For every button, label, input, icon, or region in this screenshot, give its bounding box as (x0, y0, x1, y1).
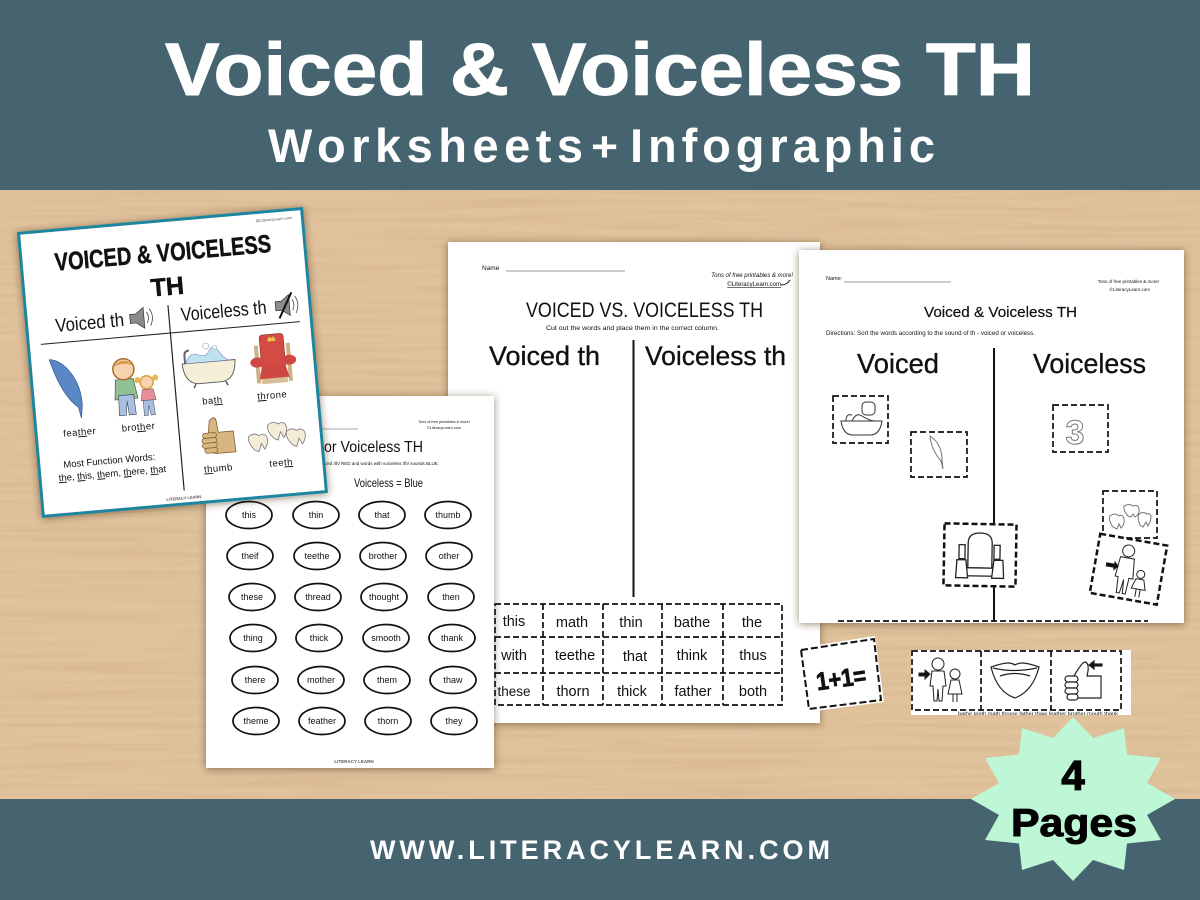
card: number three: 3 (1066, 414, 1084, 452)
card: teeth (1103, 491, 1157, 538)
oval words: feather (308, 716, 336, 726)
word cut-out grid: math (556, 615, 588, 631)
credit: @LiteracyLearn.com (255, 215, 293, 223)
word ovals (226, 502, 477, 734)
label: brother: brother (121, 421, 156, 435)
heading: voiced th: Voiced th (54, 310, 125, 337)
function words note: the, this, them, there, that (58, 464, 167, 484)
card: bath (833, 396, 888, 443)
card: number three (1053, 405, 1108, 452)
worksheet title: Voiced & Voiceless TH (924, 304, 1077, 321)
poster title: VOICED & VOICELESS (54, 230, 272, 277)
credit note: ©LiteracyLearn.com (427, 426, 461, 430)
oval words: thick (310, 633, 329, 643)
name field: Name: (826, 276, 843, 282)
oval words (241, 510, 464, 726)
word cut-out grid: father (674, 684, 712, 700)
credit note: Tons of free printables & more! (1098, 279, 1159, 284)
subtitle word: infographic: Infographic (630, 119, 935, 172)
credit note: Tons of free printables & more! (711, 273, 793, 279)
oval words: this (242, 510, 256, 520)
oval words: them (377, 675, 397, 685)
word cut-out grid: with (500, 648, 527, 664)
word cut-out grid: thus (739, 648, 767, 664)
oval words: thin (309, 510, 323, 520)
column heading: voiced: Voiced th (489, 341, 600, 371)
worksheet: cut and sort words (448, 242, 820, 723)
logo: LITERACY LEARN (334, 759, 374, 764)
card: one plus one (799, 636, 884, 712)
badge number: 4 (1061, 752, 1085, 799)
subtitle (268, 119, 935, 172)
name field: Name (482, 265, 500, 272)
oval words: these (241, 592, 263, 602)
credit note (418, 420, 470, 430)
word cut-out grid: thin (619, 615, 643, 631)
oval words: thing (243, 633, 263, 643)
wood background (0, 190, 1200, 800)
worksheet: circle the words (206, 396, 494, 768)
image: feather (49, 357, 84, 420)
credit note: ©LiteracyLearn.com (727, 281, 781, 288)
oval words: thread (305, 592, 331, 602)
oval words: thumb (435, 510, 461, 520)
label: thumb: thumb (204, 462, 233, 476)
page count badge (971, 717, 1175, 881)
oval words: teethe (304, 551, 330, 561)
function words note: Most Function Words: (63, 452, 156, 471)
oval words: thorn (378, 716, 398, 726)
badge label: Pages (1011, 802, 1137, 845)
subtitle plus sign: + (591, 123, 618, 170)
picture strip (911, 650, 1131, 716)
word cut-out grid: the (742, 615, 762, 631)
word cut-out grid: these (497, 684, 531, 699)
label: teeth: teeth (269, 457, 293, 470)
worksheet: sort pictures (799, 250, 1184, 623)
credit note: Tons of free printables & more! (418, 420, 470, 424)
name field (826, 276, 951, 282)
icon: boy and girl (919, 658, 962, 702)
label: throne: throne (257, 389, 288, 403)
word cut-out grid: think (677, 648, 708, 664)
oval words: there (245, 675, 265, 685)
image: throne (248, 332, 298, 385)
worksheet title: VOICED VS. VOICELESS TH (526, 299, 763, 322)
oval words: smooth (371, 633, 401, 643)
word cut-out grid: bathe (674, 615, 710, 631)
card: feather (911, 432, 967, 477)
credit note (711, 273, 793, 288)
word cut-out grid: that (623, 649, 647, 665)
column heading: voiceless: Voiceless th (645, 341, 786, 371)
column heading: voiceless: Voiceless (1033, 348, 1146, 379)
word cut-out grid: both (739, 684, 767, 700)
footer band (0, 799, 1200, 900)
card: throne (943, 523, 1017, 587)
column heading: voiced: Voiced (857, 348, 939, 379)
oval words: that (374, 510, 390, 520)
card: father and daughter (1090, 534, 1167, 605)
oval words: thaw (443, 675, 463, 685)
worksheet title: or Voiceless TH (324, 439, 423, 456)
icon: muted speaker (274, 292, 299, 319)
label: bath: bath (202, 395, 223, 407)
oval words: theif (241, 551, 259, 561)
oval words: brother (369, 551, 397, 561)
image: thumb (200, 416, 236, 455)
oval words: mother (307, 675, 335, 685)
card: one plus one: 1+1= (814, 662, 868, 696)
label: feather: feather (63, 426, 97, 440)
oval words: they (445, 716, 463, 726)
oval words: other (439, 551, 459, 561)
image: bath (180, 341, 237, 389)
image: teeth (247, 420, 306, 453)
icon: thumb (1065, 661, 1102, 700)
poster logo: LITERACY LEARN (166, 494, 201, 502)
infographic poster (19, 209, 326, 516)
tiny word list: bathe teeth math throne father thaw feather brother mouth thank (958, 711, 1119, 716)
word cut-out grid: thick (617, 684, 648, 700)
poster title second line: TH (150, 272, 185, 303)
instructions: Color words with voiced /th/ RED and words with voiceless /th/ sounds BLUE. (285, 461, 439, 466)
image: brother and sister (111, 356, 161, 418)
word cut-out grid (495, 604, 782, 705)
subtitle word: worksheets: Worksheets (268, 119, 583, 172)
icon: speaker (129, 307, 153, 329)
word cut-out grid: thorn (556, 684, 590, 700)
credit note (1098, 279, 1159, 292)
oval words: thought (369, 592, 400, 602)
oval words: theme (243, 716, 269, 726)
directions: Directions: Sort the words according to the sound of th - voiced or voiceless. (826, 331, 1035, 337)
function words note (57, 451, 167, 484)
oval words: then (442, 592, 460, 602)
website: WWW.LITERACYLEARN.COM (370, 835, 830, 865)
oval words: thank (441, 633, 464, 643)
header band (0, 0, 1200, 190)
credit note: ©LiteracyLearn.com (1110, 286, 1150, 292)
word cut-out grid: this (503, 614, 525, 630)
icon: lips (991, 663, 1039, 698)
instructions: Cut out the words and place them in the correct column. (546, 325, 719, 332)
colour key: Voiceless = Blue (354, 476, 423, 490)
main title: Voiced & Voiceless TH (165, 28, 1035, 111)
heading: voiceless th: Voiceless th (180, 298, 267, 326)
word cut-out grid: teethe (555, 648, 595, 664)
